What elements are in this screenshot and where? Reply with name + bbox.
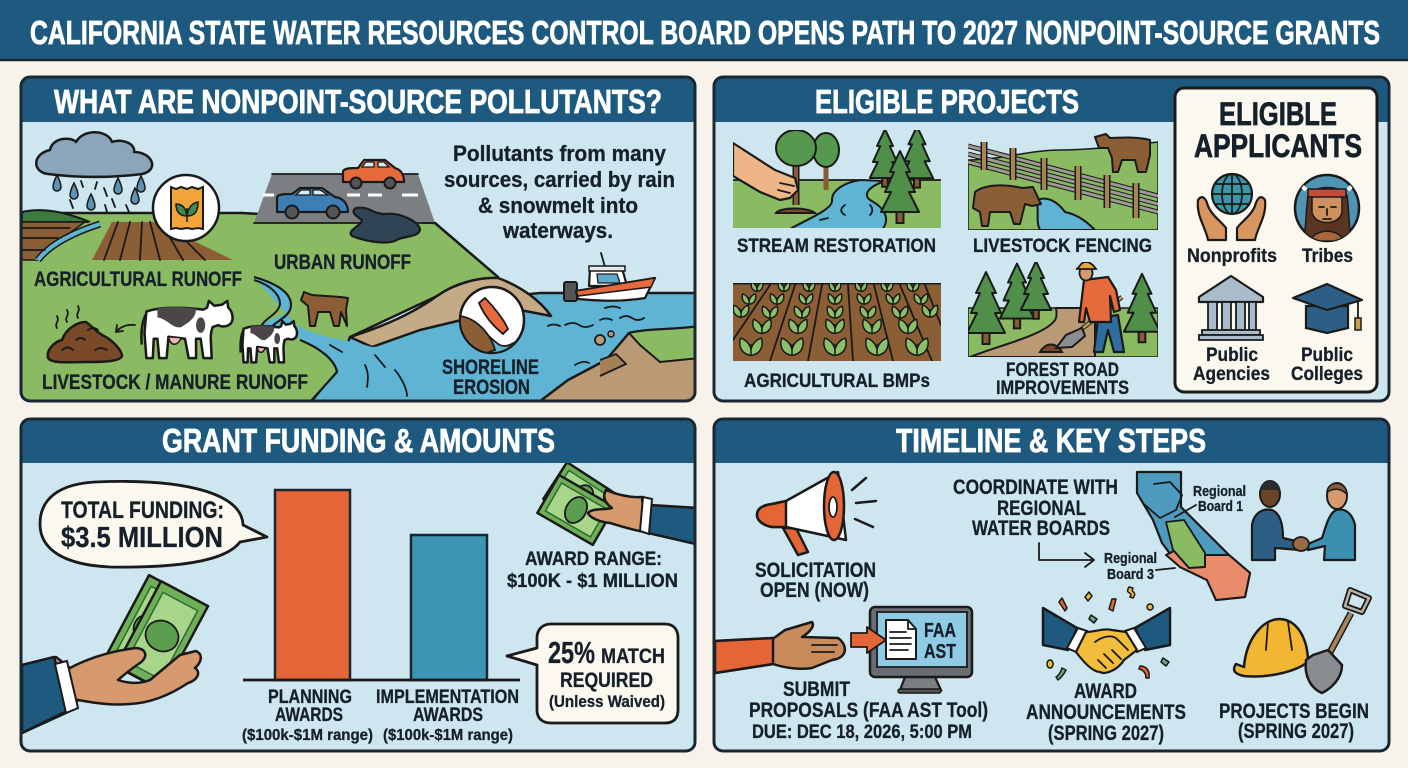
oil puddle (351, 208, 420, 242)
implementation label (376, 687, 519, 744)
icon: monitor with form: FAA (924, 620, 956, 642)
agricultural BMPs label: AGRICULTURAL BMPs (744, 371, 930, 392)
regional board 1 label: Regional (1193, 483, 1246, 500)
callout: total funding: TOTAL FUNDING: (61, 497, 224, 524)
icon: boat (564, 253, 655, 301)
heading: GRANT FUNDING & AMOUNTS (162, 422, 555, 459)
heading: WHAT ARE NONPOINT-SOURCE POLLUTANTS? (54, 83, 662, 120)
icon: hand with cash (537, 462, 700, 545)
panel: eligible projects (714, 77, 1389, 401)
callout: match required: MATCH (601, 645, 665, 668)
sand bank (350, 278, 551, 347)
panel: timeline and key steps (714, 419, 1389, 751)
award label: (SPRING 2027) (1048, 722, 1164, 745)
icon: small cow (241, 321, 297, 362)
implementation label: IMPLEMENTATION (376, 687, 519, 708)
far shore with cliff (540, 326, 694, 400)
pollutant description (444, 141, 675, 243)
farm field (22, 210, 233, 260)
planning label (242, 687, 373, 744)
projects begin label: PROJECTS BEGIN (1219, 700, 1369, 723)
icon: manure pile (48, 306, 122, 362)
planning label: PLANNING (268, 687, 352, 708)
forest road label: IMPROVEMENTS (996, 378, 1129, 399)
icon: hand holding cash (22, 575, 208, 733)
implementation bar (411, 535, 487, 680)
projects begin label: (SPRING 2027) (1238, 720, 1354, 743)
award range label (507, 549, 678, 592)
applicant labels bottom: Public (1206, 345, 1258, 366)
regional board 3 label: Regional (1104, 550, 1157, 567)
icon: two people shaking hands (1252, 481, 1355, 560)
livestock label: LIVESTOCK / MANURE RUNOFF (42, 371, 308, 394)
pollutant description: Pollutants from many (453, 141, 667, 166)
icon: orange car (343, 160, 404, 188)
submit label: PROPOSALS (FAA AST Tool) (749, 699, 988, 722)
heading: ELIGIBLE PROJECTS (815, 83, 1079, 120)
icon: graduation cap (1293, 284, 1362, 333)
coordinate label: REGIONAL (997, 497, 1086, 520)
icon: megaphone (757, 472, 876, 555)
callout: total funding (40, 481, 267, 567)
regional board 3 label: Board 3 (1107, 566, 1154, 583)
solicitation label: OPEN (NOW) (760, 579, 869, 602)
applicant labels bottom: Colleges (1291, 364, 1363, 385)
icon: brown cow (301, 292, 348, 326)
panel: grant funding and amounts (21, 419, 700, 751)
planning bar (275, 490, 350, 680)
icon: shovel (1306, 590, 1369, 693)
shoreline erosion label: SHORELINE (442, 356, 539, 379)
applicant labels bottom (1193, 345, 1363, 385)
coordinate label: WATER BOARDS (972, 517, 1110, 540)
applicant labels bottom: Agencies (1193, 364, 1270, 385)
applicant labels bottom: Public (1301, 345, 1353, 366)
livestock fencing label: LIVESTOCK FENCING (973, 236, 1152, 257)
regional board 1 label: Board 1 (1198, 498, 1243, 515)
applicant labels top (1187, 246, 1353, 267)
card: eligible applicants (1175, 88, 1377, 392)
arrow: to regional boards (1039, 543, 1094, 567)
road (254, 174, 435, 223)
card heading: ELIGIBLE (1219, 96, 1337, 132)
pollutant description: sources, carried by rain (444, 167, 675, 192)
urban runoff label: URBAN RUNOFF (274, 251, 411, 274)
award label (1026, 680, 1186, 745)
icon: large cow (141, 301, 233, 358)
solicitation label (755, 559, 876, 602)
pollutant description: waterways. (502, 218, 613, 243)
coordinate label (953, 476, 1118, 540)
scene: agricultural BMPs (733, 282, 941, 361)
award label: ANNOUNCEMENTS (1026, 701, 1186, 724)
submit label: DUE: DEC 18, 2026, 5:00 PM (752, 722, 972, 743)
submit label: SUBMIT (783, 678, 850, 701)
callout: match required (507, 624, 678, 723)
coordinate label: COORDINATE WITH (953, 476, 1118, 499)
icon: award handshake with confetti (1043, 587, 1170, 680)
heading bar (21, 77, 695, 122)
implementation label: ($100k-$1M range) (383, 727, 513, 744)
regional board 3 label (1104, 550, 1175, 583)
callout: match required: (Unless Waived) (549, 692, 665, 711)
icon: California map (1137, 472, 1250, 600)
scene: forest road improvements (967, 261, 1160, 357)
icon: hand submitting (715, 622, 845, 673)
card heading (1194, 96, 1362, 164)
forest road label (996, 360, 1129, 399)
projects begin label (1219, 700, 1369, 743)
solicitation label: SOLICITATION (755, 559, 876, 582)
applicant labels top: Tribes (1302, 246, 1353, 267)
implementation label: AWARDS (413, 705, 483, 726)
scene: stream restoration (733, 126, 941, 232)
shore waves (548, 306, 644, 365)
award range label: AWARD RANGE: (525, 549, 662, 570)
icon: monitor with form (870, 607, 972, 693)
heading: TIMELINE & KEY STEPS (896, 422, 1206, 459)
agricultural runoff label: AGRICULTURAL RUNOFF (34, 268, 242, 291)
callout: match required: 25% (548, 635, 595, 670)
award range label: $100K - $1 MILLION (507, 571, 678, 592)
applicant labels top: Nonprofits (1187, 246, 1277, 267)
pollutant description: & snowmelt into (478, 193, 638, 218)
panel: what are nonpoint-source pollutants (15, 77, 700, 405)
award label: AWARD (1074, 680, 1137, 703)
river (255, 278, 377, 400)
bar chart (243, 490, 520, 680)
icon: blue car (277, 188, 348, 218)
icon: tribal portrait (1295, 175, 1359, 241)
land (15, 213, 500, 405)
icon: monitor with form: AST (924, 641, 956, 663)
icon: hard hat (1234, 619, 1308, 676)
arrow: cow to manure (116, 325, 135, 332)
regional board 1 label (1175, 483, 1246, 517)
planning label: AWARDS (275, 705, 343, 726)
water body (320, 293, 700, 401)
icon: shoreline erosion inset (458, 286, 526, 354)
card heading: APPLICANTS (1194, 128, 1362, 164)
shoreline erosion label: EROSION (453, 376, 530, 399)
submit label (749, 678, 988, 743)
icon: government building (1199, 276, 1263, 340)
arrow: submit (851, 627, 886, 653)
icon: fertilizer bag (153, 175, 219, 241)
icon: rain cloud (36, 132, 152, 212)
title banner (0, 0, 1408, 60)
stream restoration label: STREAM RESTORATION (737, 236, 936, 257)
planning label: ($100k-$1M range) (242, 727, 373, 744)
scene: livestock fencing (968, 134, 1158, 230)
callout: match required: REQUIRED (560, 669, 653, 692)
callout: total funding: $3.5 MILLION (61, 522, 223, 554)
forest road label: FOREST ROAD (1006, 360, 1119, 381)
icon: globe in hands (1198, 174, 1265, 240)
shoreline erosion label (442, 356, 539, 399)
